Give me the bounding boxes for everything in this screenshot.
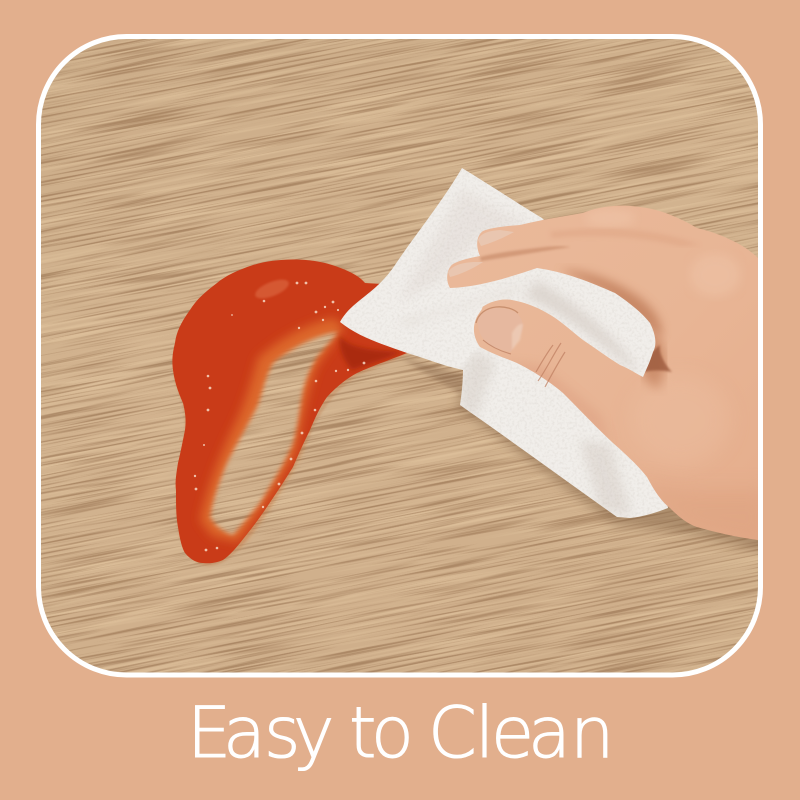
hand (447, 206, 770, 550)
white towel, back layer (340, 168, 668, 518)
hand and towel shadow (455, 380, 770, 552)
hand shading (480, 209, 770, 550)
thumb knuckle creases (536, 343, 565, 387)
thumb nail (476, 307, 523, 354)
ketchup smear (172, 259, 430, 566)
hand crease (644, 345, 672, 372)
finger nails (448, 230, 514, 277)
towel fold over fingers (450, 268, 656, 377)
white border (38, 36, 760, 675)
title: Easy to Clean (187, 692, 614, 774)
sauce highlights and shading (194, 276, 402, 551)
photo panel (36, 34, 763, 678)
wood table surface (41, 39, 758, 672)
